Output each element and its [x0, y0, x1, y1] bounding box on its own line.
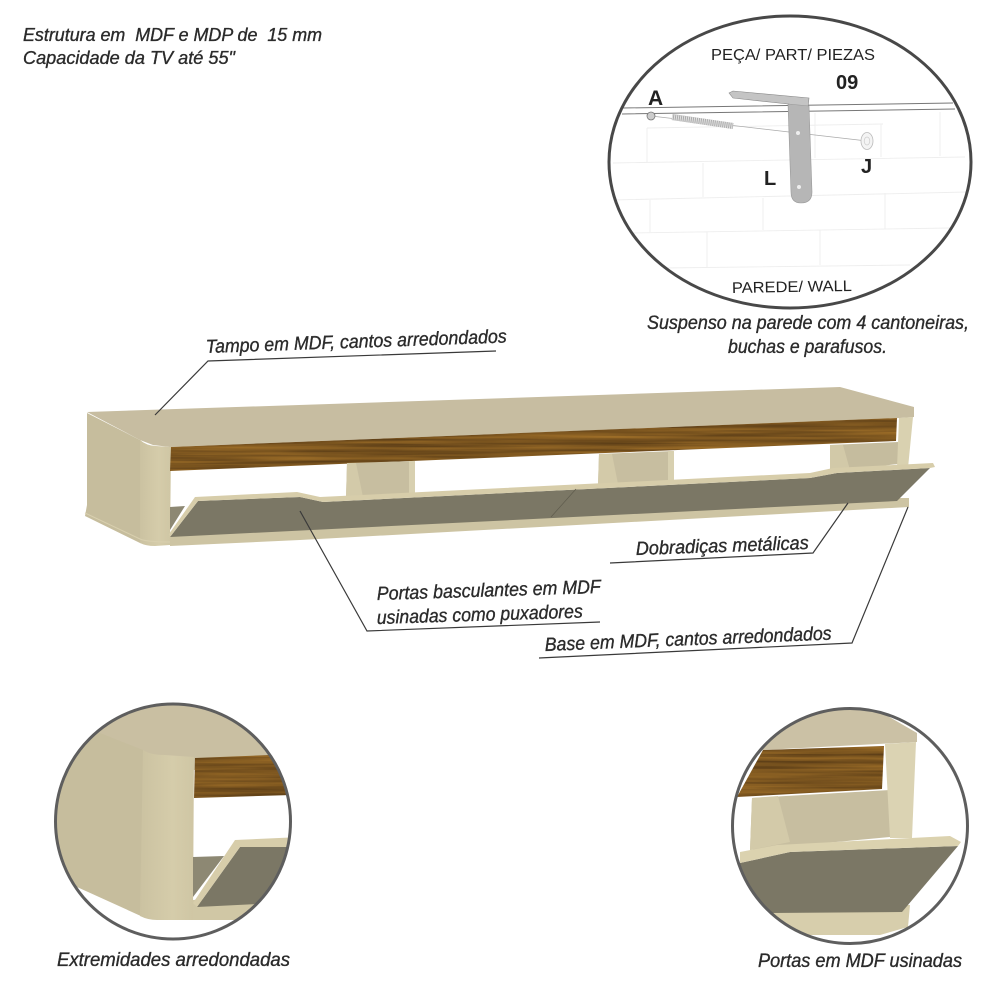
letter L: L — [764, 168, 776, 190]
part count label: PEÇA/ PART/ PIEZAS — [711, 47, 875, 64]
wood crop — [738, 746, 884, 797]
left side panel — [85, 413, 146, 544]
side panel crop — [57, 770, 143, 916]
base strip crop — [193, 899, 254, 920]
wood crop — [194, 755, 286, 798]
inner left shadow triangle — [170, 506, 185, 530]
label: tilting doors: usinadas como puxadores — [376, 602, 584, 629]
letter A: A — [648, 87, 663, 110]
base board — [170, 498, 909, 546]
caption: machined doors: Portas em MDF usinadas — [758, 951, 962, 972]
dark door triangle crop — [193, 856, 224, 897]
circle frame — [732, 708, 968, 944]
label: base — [539, 507, 908, 658]
top surface — [87, 387, 914, 447]
door edge crop — [195, 838, 288, 907]
back panel highlight — [750, 796, 790, 850]
divider left — [346, 461, 415, 498]
divider center — [598, 451, 674, 485]
end panel crop — [885, 742, 916, 838]
header: structure and TV capacity: Capacidade da TV até 55" — [23, 48, 237, 68]
label: hinges — [610, 503, 848, 563]
fixing axis line — [651, 116, 867, 141]
mounting caption — [647, 313, 969, 358]
header: structure and TV capacity — [23, 25, 322, 68]
door dark face — [170, 468, 930, 537]
icon: washer J — [861, 132, 873, 150]
label: base: Base em MDF, cantos arredondados — [544, 623, 832, 656]
header: structure and TV capacity: Estrutura em MDF e MDP de 15 mm — [23, 25, 322, 45]
letter J: J — [861, 156, 872, 178]
wall label: PAREDE/ WALL — [732, 278, 853, 297]
edge highlight — [85, 513, 170, 542]
wall bricks — [613, 112, 967, 268]
icon: screw A — [647, 112, 733, 126]
mounting caption: Suspenso na parede com 4 cantoneiras, — [647, 313, 969, 334]
right end panel — [897, 417, 913, 468]
panel: wall mounting diagram — [609, 16, 971, 308]
circle frame — [56, 704, 290, 939]
door edge crop — [740, 836, 961, 863]
ellipse frame — [609, 16, 971, 308]
column crop — [140, 750, 194, 920]
mounting caption: buchas e parafusos. — [728, 337, 887, 358]
main product: TV shelf — [85, 387, 935, 546]
top surface crop — [762, 710, 917, 750]
wood back panel — [170, 418, 897, 471]
label: top: Tampo em MDF, cantos arredondados — [205, 326, 507, 358]
label: top — [155, 326, 507, 415]
base crop — [774, 905, 910, 935]
label: tilting doors: Portas basculantes em MDF — [376, 577, 602, 605]
divider right — [830, 442, 898, 472]
left front column — [140, 440, 171, 546]
door face crop — [730, 846, 958, 913]
caption: rounded ends: Extremidades arredondadas — [57, 950, 290, 971]
back panel crop — [750, 790, 890, 850]
panel: rounded ends detail — [50, 700, 305, 939]
shelf underside lines — [622, 103, 955, 114]
door top edge — [169, 463, 935, 537]
door face crop — [197, 847, 286, 907]
label: tilting doors — [300, 511, 602, 631]
label: hinges: Dobradiças metálicas — [635, 533, 810, 560]
top surface crop — [98, 706, 268, 770]
panel: machined doors detail — [730, 700, 968, 944]
door split — [551, 489, 576, 517]
part count number: 09 — [836, 72, 858, 94]
icon: L bracket — [729, 91, 812, 203]
